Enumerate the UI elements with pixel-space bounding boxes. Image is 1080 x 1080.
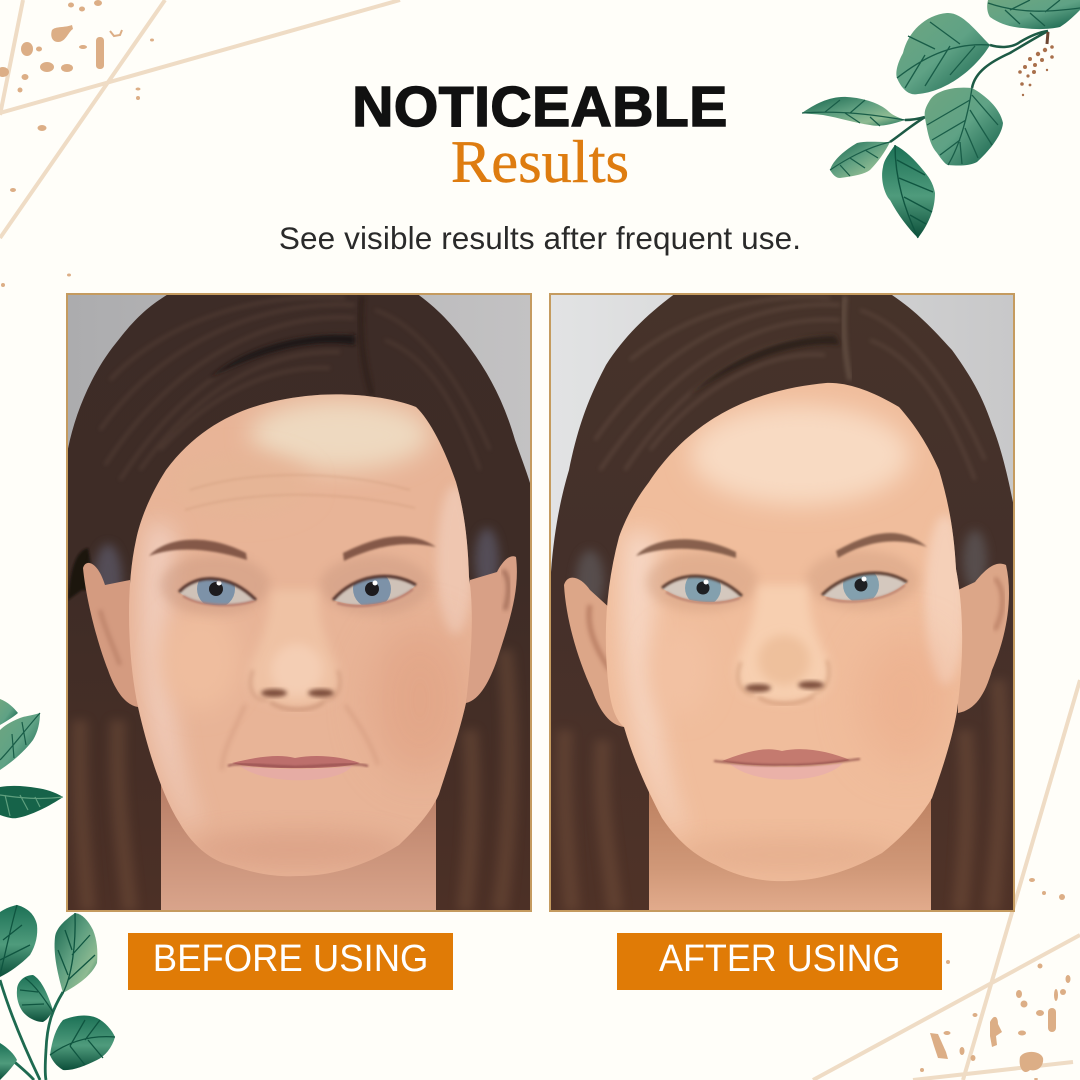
decorative gold lines: bottom right (813, 680, 1080, 1080)
decorative speckles: top left (0, 0, 154, 287)
title: NOTICEABLE: NOTICEABLE (352, 75, 728, 139)
leaf sprig: bottom left (0, 905, 115, 1080)
photo panel: after using (550, 293, 1015, 911)
eye: after right (820, 570, 909, 604)
eyebrows: before (149, 536, 436, 561)
ears: before (83, 556, 517, 707)
hair: after (550, 293, 1015, 911)
ears: after (564, 564, 1009, 727)
eyebrows: after (636, 533, 927, 558)
subtitle: See visible results after frequent use. (279, 220, 801, 256)
speckles by top right sprig (1018, 45, 1054, 96)
title: Results: Results (451, 129, 629, 196)
leaf sprig: left edge (0, 699, 63, 818)
decorative gold lines: top left (0, 0, 400, 238)
nose: before (248, 590, 340, 710)
face: after (606, 383, 965, 881)
photo panel: before using (66, 293, 532, 911)
nose: after (736, 585, 830, 704)
eye: before left (177, 576, 258, 607)
mouth: after (714, 749, 860, 780)
label: after using (617, 933, 942, 990)
label: after using: AFTER USING (659, 938, 900, 980)
face: before (129, 394, 473, 876)
mouth: before (228, 756, 368, 780)
neck: before (161, 780, 436, 911)
neck: after (649, 790, 931, 911)
leaf sprig: top right (802, 0, 1080, 238)
label: before using: BEFORE USING (153, 938, 428, 980)
hair: before (66, 293, 532, 911)
eye: before right (330, 573, 418, 608)
label: before using (128, 933, 453, 990)
eye: after left (660, 573, 744, 605)
decorative speckles: bottom right (920, 878, 1070, 1080)
